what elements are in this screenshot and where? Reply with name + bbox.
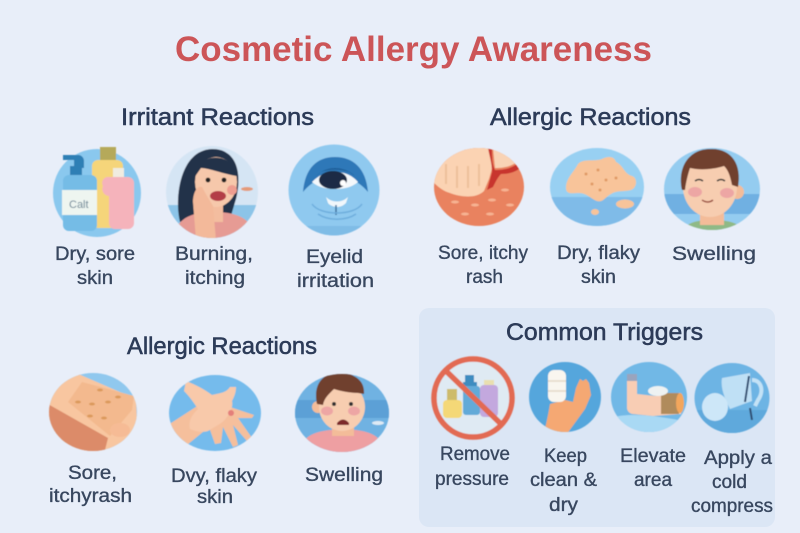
- icon: skin patch on arm: [48, 372, 138, 454]
- panel: common triggers: [419, 308, 775, 527]
- label: keep clean and dry: dry: [549, 494, 578, 516]
- label: remove pressure: [435, 443, 510, 490]
- icon: eye irritation: [288, 144, 380, 236]
- heading: allergic reactions, lower left: Allergic Reactions: [127, 333, 317, 360]
- heading: irritant reactions: Irritant Reactions: [121, 104, 314, 131]
- label: swelling, lower: Swelling: [305, 464, 383, 486]
- label: swelling: Swelling: [672, 243, 756, 265]
- heading: common triggers: Common Triggers: [506, 319, 703, 346]
- heading: allergic reactions, upper right: Allergic Reactions: [490, 104, 691, 131]
- label: burning, itching: itching: [185, 267, 245, 289]
- label: dry, flaky skin: skin: [581, 266, 616, 288]
- label: sore, itchy rash: Sore, itchy: [438, 242, 528, 264]
- label: elevate area: Elevate: [620, 445, 686, 467]
- label: keep clean and dry: [530, 445, 597, 516]
- label: dry, sore skin: [55, 243, 135, 289]
- label: elevate area: area: [634, 469, 672, 491]
- label: dry, flaky skin, lower: Dvy, flaky: [171, 465, 257, 487]
- label: sore, itchy rash, lower: [49, 462, 132, 507]
- label: sore, itchy rash, lower: Sore,: [68, 462, 117, 484]
- label: dry, sore skin: skin: [77, 267, 113, 289]
- label: eyelid irritation: Eyelid: [306, 246, 363, 268]
- icon: bandaged finger: [528, 361, 602, 433]
- label: apply a cold compress: cold: [712, 471, 747, 493]
- label: remove pressure: pressure: [435, 468, 509, 490]
- label: burning, itching: [175, 243, 253, 289]
- label: eyelid irritation: [297, 246, 374, 292]
- label: dry, flaky skin, lower: [171, 465, 257, 508]
- label: dry, flaky skin: [557, 242, 640, 288]
- label: dry, sore skin: Dry, sore: [55, 243, 135, 265]
- icon: dry flaky skin patch: [548, 146, 646, 229]
- label: dry, flaky skin: Dry, flaky: [557, 242, 640, 264]
- icon: fingers over rash: [433, 148, 525, 227]
- icon: cosmetic bottles: Calt: [69, 199, 89, 211]
- label: eyelid irritation: irritation: [297, 270, 374, 292]
- icon: elevated arm: [610, 362, 688, 434]
- label: elevate area: [620, 445, 686, 491]
- title: Cosmetic Allergy Awareness: [175, 30, 652, 69]
- label: burning, itching: Burning,: [175, 243, 253, 265]
- label: sore, itchy rash: rash: [466, 266, 503, 288]
- icon: prohibited cosmetics: [434, 359, 512, 437]
- label: remove pressure: Remove: [440, 443, 510, 465]
- label: dry, flaky skin, lower: skin: [197, 486, 233, 508]
- icon: woman with burning face: [166, 146, 258, 238]
- label: apply a cold compress: Apply a: [704, 447, 772, 469]
- label: keep clean and dry: Keep: [544, 445, 587, 467]
- icon: hands scratching: [168, 374, 262, 454]
- icon: crying boy: [294, 373, 390, 454]
- label: apply a cold compress: compress: [691, 495, 773, 517]
- label: sore, itchy rash: [438, 242, 528, 288]
- icon: cold compress: [694, 362, 770, 434]
- label: sore, itchy rash, lower: itchyrash: [49, 485, 132, 507]
- label: apply a cold compress: [691, 447, 773, 517]
- label: keep clean and dry: clean &: [530, 469, 597, 491]
- icon: cosmetic bottles: [53, 147, 141, 237]
- icon: boy with swelling: [664, 148, 760, 231]
